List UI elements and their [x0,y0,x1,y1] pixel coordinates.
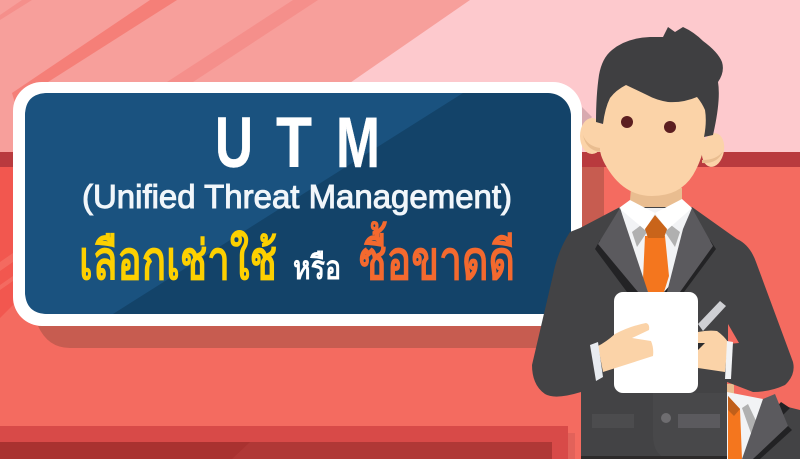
background: lower wall with red band [0,152,800,459]
title panel [13,82,582,326]
shadow behind ear [582,107,592,127]
headline: buy option: ซื้อขาดดี [359,221,515,291]
jacket [532,207,794,459]
heading: UTM [215,104,380,183]
pen [698,301,726,331]
heading: UTM: U [215,104,253,183]
subheading: full name: (Unified Threat Management) [82,178,512,215]
main person [532,27,794,459]
heading: UTM: M [336,104,380,183]
second person at lower right [724,384,800,459]
eyes [621,116,676,133]
headline: lease option: เลือกเช่าใช้ [79,229,277,291]
background: pink sky and salmon diagonal band [0,0,800,160]
headline: or: หรือ [293,249,341,286]
heading: UTM: T [276,104,312,183]
background gap triangle [728,324,739,344]
right hand [698,331,733,379]
shirt [620,208,692,292]
collar [619,199,692,230]
notepad [614,292,698,393]
face [600,80,707,196]
left hand [590,323,653,381]
floor steps [0,426,575,459]
ears [580,118,727,169]
lapel shadows [595,240,716,292]
hair [596,27,723,137]
shirt collar shadows [632,222,680,247]
tie [643,215,669,292]
jacket right front panel [653,393,727,459]
pockets and button [592,413,720,428]
neck [630,188,682,216]
jacket bottom hem [581,456,727,459]
lapels [598,208,713,292]
title panel shadow [38,167,604,348]
